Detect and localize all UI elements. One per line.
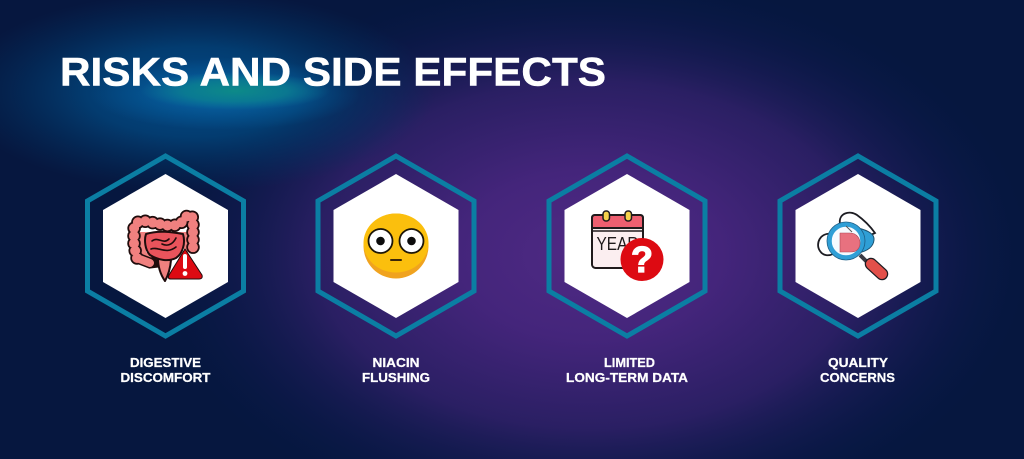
label: limited long-term data: LONG-TERM DATA [566,371,688,385]
hexagon frame: niacin [318,156,474,336]
label: digestive discomfort: DISCOMFORT [120,371,211,385]
hexagon frame: quality [780,156,936,336]
panel: digestive discomfort [88,156,244,385]
label: limited long-term data: LIMITED [604,356,655,370]
title: RISKS AND SIDE EFFECTS [60,50,606,94]
panel: niacin flushing [318,156,474,385]
hexagon frame: digestive [88,156,244,336]
label: digestive discomfort: DIGESTIVE [130,356,201,370]
label: quality concerns: QUALITY [828,356,889,370]
icon: warning triangle [168,249,202,279]
hexagon frame: limited data [549,156,705,336]
icon: calendar with question mark [592,211,664,281]
label: quality concerns: CONCERNS [820,371,895,385]
panel: quality concerns [780,156,936,385]
label: niacin flushing: FLUSHING [362,371,430,385]
icon: flushed face emoji [364,214,428,278]
icon: calendar with question mark: ? [631,239,653,280]
icon: calendar with question mark: YEAR [596,234,638,254]
panel: limited long-term data [549,156,705,385]
label: niacin flushing: NIACIN [372,356,420,370]
icon: intestines with warning [134,215,202,281]
icon: magnifier over capsule [818,213,882,274]
